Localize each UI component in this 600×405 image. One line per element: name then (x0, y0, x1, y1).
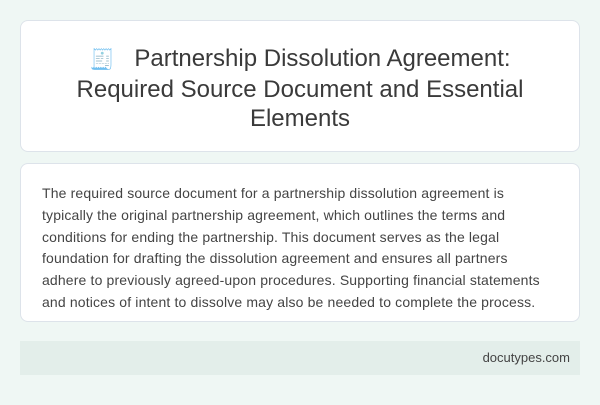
footer: docutypes.com (483, 350, 570, 365)
heading: Required Source Document and Essential (77, 76, 523, 103)
panel: title (20, 20, 580, 152)
text block: typically the original partnership agreement, which outlines the terms and (42, 207, 505, 223)
text block: and notices of intent to dissolve may also be needed to complete the process. (42, 294, 535, 310)
heading: Elements (250, 105, 350, 132)
text block: foundation for drafting the dissolution agreement and ensures all partners (42, 250, 508, 266)
footer (20, 341, 580, 375)
text block: conditions for ending the partnership. This document serves as the legal (42, 229, 499, 245)
heading (77, 45, 523, 132)
text block: adhere to previously agreed-upon procedures. Supporting financial statements (42, 272, 540, 288)
panel: description (20, 163, 580, 322)
text block (42, 185, 540, 310)
text block: The required source document for a partnership dissolution agreement is (42, 185, 504, 201)
heading: 🧾 Partnership Dissolution Agreement: (89, 45, 511, 72)
